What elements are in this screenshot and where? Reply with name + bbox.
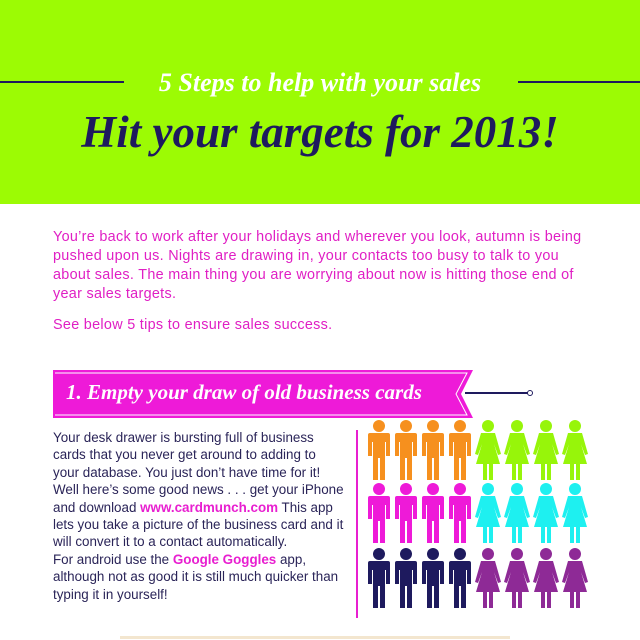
banner: step 1 [53,370,533,418]
intro text: pushed upon us. Nights are drawing in, your contacts too busy to talk to you [53,248,559,264]
body text: although not as good it is still much quicker than [53,569,338,584]
left rule [0,81,124,83]
subtitle: 5 Steps to help with your sales [159,68,481,97]
body text: Well here’s some good news . . . get your iPhone [53,482,344,497]
body text: your database. You just don’t have time for it! [53,465,320,480]
bottom rule [120,636,510,639]
people chart [368,420,588,608]
header band [0,0,640,204]
intro text [53,229,581,333]
body text: and download www.cardmunch.com This app [53,500,333,515]
intro text: about sales. The main thing you are worrying about now is hitting those end of [53,267,574,283]
intro text: See below 5 tips to ensure sales success. [53,317,332,333]
body text: cards that you never get around to adding to [53,447,316,462]
title: Hit your targets for 2013! [81,107,559,157]
banner: step 1: 1. Empty your draw of old business cards [66,380,422,404]
right rule [518,81,640,83]
body text: For android use the Google Goggles app, [53,552,306,567]
body text: lets you take a picture of the business card and it [53,517,343,532]
body text: typing it in yourself! [53,587,168,602]
body text: will convert it to a contact automatically. [53,534,287,549]
body text [53,430,344,602]
divider line [356,430,358,618]
body text: Your desk drawer is bursting full of business [53,430,314,445]
intro text: year sales targets. [53,286,176,302]
intro text: You’re back to work after your holidays and wherever you look, autumn is being [53,229,581,245]
